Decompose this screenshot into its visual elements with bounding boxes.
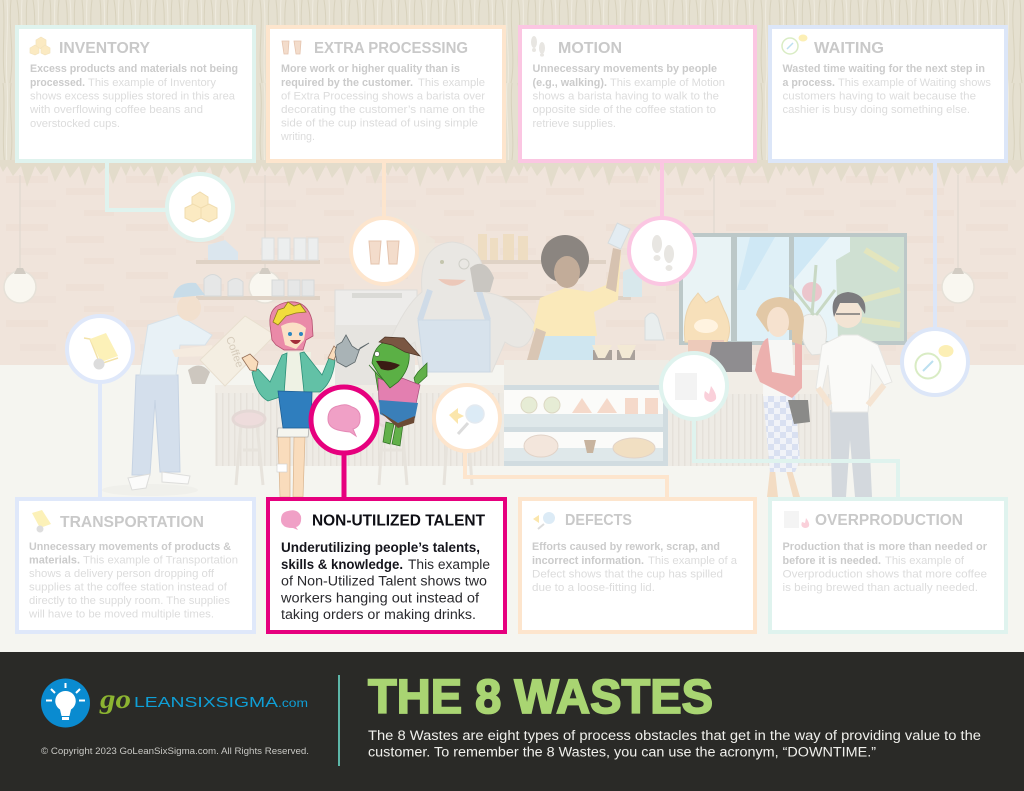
icon: two cups — [369, 241, 399, 264]
icon: hand truck — [84, 333, 118, 370]
text block: before it is needed. — [782, 555, 881, 567]
character: woman customer — [755, 297, 810, 497]
icon: magnifier small — [533, 512, 555, 529]
text block: taking orders or making drinks. — [281, 607, 476, 622]
text block: required by the customer. — [281, 77, 413, 89]
panel: overproduction — [770, 499, 1006, 632]
connector: non-utilized talent — [342, 452, 346, 497]
icon circle: inventory — [167, 174, 233, 240]
panel: waiting — [770, 27, 1006, 161]
coffee pot and drippers — [592, 313, 664, 378]
text block: This example of Transportation — [83, 554, 238, 566]
text block: skills & knowledge. — [281, 557, 403, 572]
panel: defects — [520, 499, 755, 632]
logo wordmark — [99, 684, 308, 714]
text block: Production that is more than needed or — [782, 541, 988, 553]
text block — [782, 63, 991, 116]
panel: motion — [520, 27, 755, 161]
text block: Excess products and materials not being — [30, 63, 238, 75]
text block — [782, 541, 988, 594]
connector: waiting — [933, 163, 937, 332]
text block: Defect shows that the cup has spilled — [532, 568, 723, 580]
text block: This example of Waiting shows — [838, 77, 991, 89]
hanging lamps — [4, 175, 974, 303]
text block: retrieve supplies. — [532, 118, 616, 130]
panel: non-utilized talent (highlighted) — [268, 499, 505, 632]
character: delivery person with coffee sack: Coffee — [223, 335, 245, 369]
text block — [28, 541, 238, 620]
text block: decorating the customer’s name on the — [281, 104, 485, 116]
connector: transportation — [98, 382, 102, 497]
icon: brain small — [281, 510, 301, 530]
icon circle: transportation — [67, 316, 133, 382]
text block: materials. — [29, 554, 80, 566]
panel: inventory — [17, 27, 254, 161]
connector: inventory — [107, 163, 170, 210]
description: The 8 Wastes are eight types of process obstacles that get in the way of providing value to the — [368, 728, 981, 743]
character: fox cashier — [684, 293, 752, 372]
logo wordmark: go — [99, 684, 131, 714]
text block: supplies at the coffee station instead of — [29, 582, 228, 594]
logo wordmark: .com — [278, 698, 308, 710]
character: walrus barista — [388, 242, 535, 372]
character: delivery person with coffee sack — [102, 283, 275, 496]
connector: defects — [465, 452, 667, 497]
icon circle: extra processing — [351, 218, 417, 284]
text block: side of the cup instead of using simple — [281, 118, 478, 130]
divider — [338, 675, 340, 766]
character: pink-haired worker (full colour) — [242, 302, 369, 497]
display case with pastries — [504, 360, 669, 466]
heading: EXTRA PROCESSING — [314, 40, 468, 57]
text block: writing. — [280, 131, 315, 143]
icon: cups small — [282, 41, 301, 54]
description: customer. To remember the 8 Wastes, you can use the acronym, “DOWNTIME.” — [368, 744, 876, 760]
copyright: © Copyright 2023 GoLeanSixSigma.com. All Rights Reserved. — [41, 746, 309, 757]
heading: MOTION — [558, 40, 622, 57]
text block: customers having to wait because the — [782, 90, 976, 102]
icon: clock and speech bubble — [916, 345, 954, 378]
text block: of Extra Processing shows a barista over — [281, 90, 485, 102]
connector: motion — [660, 163, 664, 222]
character: man customer — [816, 292, 892, 497]
heading: DEFECTS — [565, 512, 632, 529]
footer band — [0, 652, 1024, 791]
background: thatched roof — [0, 0, 1024, 188]
text block: due to a loose-fitting lid. — [532, 582, 655, 594]
text block: Overproduction shows that more coffee — [782, 568, 987, 580]
icon: clock small — [782, 34, 808, 54]
text block: directly to the supply room. The supplies — [29, 595, 230, 607]
vase with flowers — [790, 265, 835, 355]
text block: shows a barista having to walk to the — [532, 90, 719, 102]
text block: This example of a — [648, 555, 738, 567]
title: THE 8 WASTES — [368, 671, 713, 724]
heading: INVENTORY — [59, 40, 150, 57]
icon circle: defects — [434, 385, 500, 451]
text block: (e.g., walking). — [532, 77, 607, 89]
icon: cubes small — [30, 37, 50, 55]
text block: This example of — [885, 555, 965, 567]
text block: This example — [418, 77, 485, 89]
background: brick wall — [0, 165, 1024, 365]
text block: Unnecessary movements of products & — [29, 541, 231, 553]
icon: cubes — [185, 192, 217, 222]
panel: transportation — [17, 499, 254, 632]
character: barista reaching up — [527, 235, 621, 360]
text block: This example of Motion — [610, 77, 725, 89]
heading: TRANSPORTATION — [60, 514, 204, 531]
text block: Underutilizing people’s talents, — [281, 540, 480, 555]
text block: workers hanging out instead of — [280, 590, 479, 606]
shelves with cups and kettles — [196, 223, 642, 300]
text block: is being brewed than actually needed. — [782, 582, 978, 594]
heading: WAITING — [814, 40, 884, 57]
text block: processed. — [30, 77, 85, 89]
connector: extra processing — [382, 163, 386, 222]
icon circle: motion — [629, 218, 695, 284]
text block: shows excess supplies stored in this area — [30, 90, 236, 102]
text block: This example — [408, 557, 490, 572]
description — [368, 728, 981, 760]
icon: footprints small — [531, 36, 545, 57]
heading: NON-UTILIZED TALENT — [312, 512, 485, 530]
icon: stacked cups and flame — [675, 373, 716, 402]
bar stools — [233, 411, 472, 485]
text block: opposite side of the coffee station to — [532, 104, 716, 116]
text block: Unnecessary movements by people — [532, 63, 717, 75]
text block: of Non-Utilized Talent shows two — [281, 574, 487, 588]
icon circle: overproduction — [661, 353, 727, 419]
text block: cashier is busy doing something else. — [782, 104, 970, 116]
text block — [532, 541, 738, 594]
icon: hand truck small — [32, 510, 51, 532]
icon: footprints — [652, 235, 674, 271]
icon: brain — [328, 405, 360, 436]
text block: shows a delivery person dropping off — [29, 568, 215, 580]
window with palm tree — [679, 233, 907, 345]
text block: This example of Inventory — [88, 77, 217, 89]
logo wordmark: LEANSIXSIGMA — [134, 695, 278, 711]
text block: Efforts caused by rework, scrap, and — [532, 541, 720, 553]
text block: Wasted time waiting for the next step in — [782, 63, 985, 75]
text block — [532, 63, 725, 130]
text block: incorrect information. — [532, 555, 644, 567]
text block — [280, 540, 490, 622]
text block — [280, 63, 485, 143]
icon circle: non-utilized talent — [311, 387, 377, 453]
icon: magnifier with spill — [449, 405, 484, 434]
panel: extra processing — [268, 27, 504, 161]
icon circle: waiting — [902, 329, 968, 395]
character: green creature (full colour) — [369, 337, 427, 446]
text block: More work or higher quality than is — [281, 63, 460, 75]
connector: overproduction — [694, 420, 898, 497]
icon: light bulb logo — [41, 678, 90, 728]
text block: a process. — [782, 77, 835, 89]
text block: with overflowing coffee beans and — [29, 104, 203, 116]
heading: OVERPRODUCTION — [815, 512, 963, 529]
icon: cups and flame small — [784, 511, 809, 528]
text block: overstocked cups. — [30, 118, 120, 130]
text block: will have to be moved multiple times. — [28, 608, 214, 620]
text block — [29, 63, 238, 130]
back counter — [215, 370, 833, 466]
espresso machine — [335, 215, 435, 385]
